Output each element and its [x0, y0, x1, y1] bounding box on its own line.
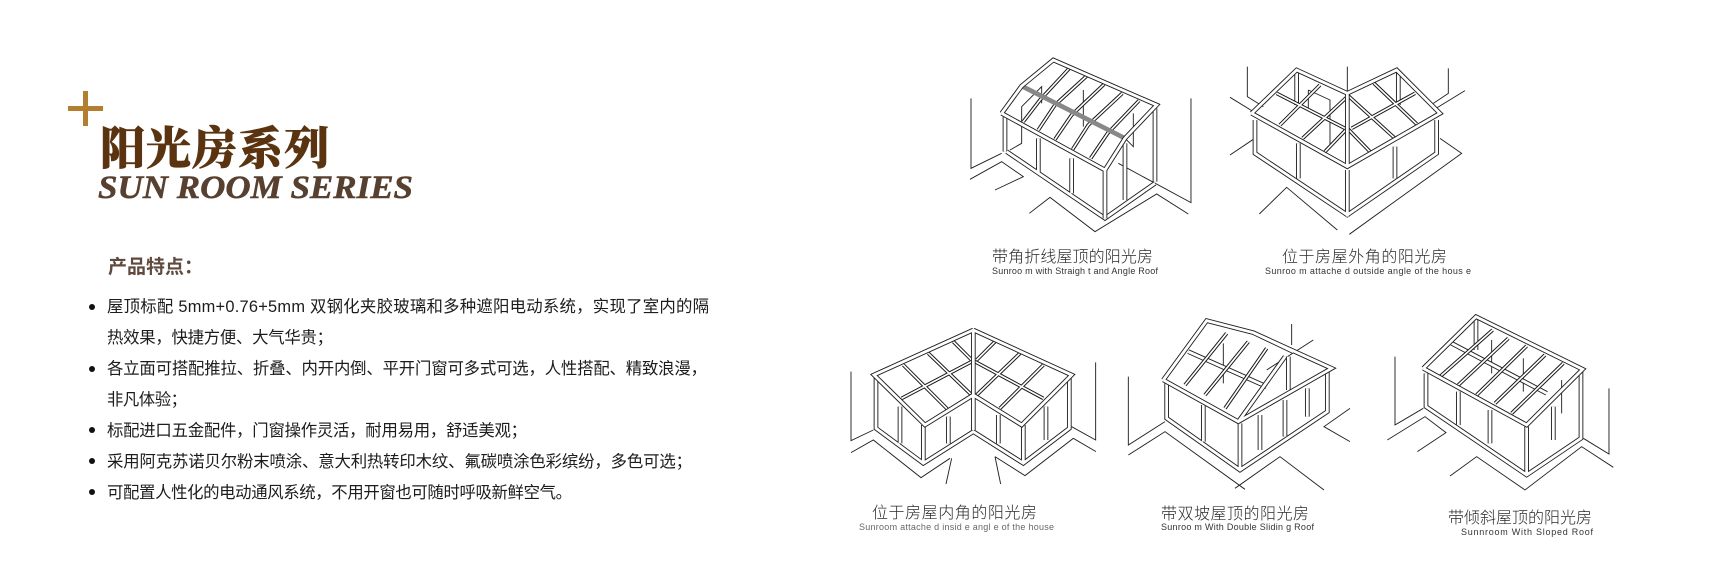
caption: English: Sunnroom With Sloped Roof	[1461, 527, 1593, 537]
panel: sunroom with double sliding roof	[1128, 321, 1350, 532]
heading: English title: SUN ROOM SERIES	[98, 170, 413, 206]
caption: English: Sunroo m with Straigh t and Angle Roof	[992, 266, 1158, 276]
heading: Chinese title: 阳光房系列	[100, 123, 329, 174]
caption: Chinese: 带双坡屋顶的阳光房	[1161, 505, 1309, 523]
panel: sunroom attached outside angle of the house	[1230, 67, 1471, 276]
caption: Chinese: 带角折线屋顶的阳光房	[992, 248, 1153, 266]
feature item 2: 各立面可搭配推拉、折叠、内开内倒、平开门窗可多式可选，人性搭配、精致浪漫，	[107, 355, 707, 379]
caption: Chinese: 位于房屋内角的阳光房	[872, 504, 1037, 522]
icon: plus mark	[68, 91, 103, 126]
diagram: straight and angle roof	[970, 60, 1191, 232]
feature item 1	[89, 293, 709, 348]
diagram: double sliding roof	[1128, 321, 1350, 490]
feature item 1: 屋顶标配 5mm+0.76+5mm 双钢化夹胶玻璃和多种遮阳电动系统，实现了室内的隔	[107, 293, 709, 317]
feature item 3: 标配进口五金配件，门窗操作灵活，耐用易用，舒适美观；	[107, 417, 527, 441]
diagram: inside angle	[851, 330, 1096, 484]
panel: sunroom with sloped roof	[1387, 317, 1613, 537]
diagram: sloped roof	[1387, 317, 1613, 490]
feature item 1: 热效果，快捷方便、大气华贵；	[107, 324, 333, 348]
feature item 2: 非凡体验；	[107, 386, 187, 410]
caption: English: Sunroom attache d insid e angl e of the house	[859, 522, 1054, 532]
panel: sunroom with straight and angle roof	[970, 60, 1191, 276]
feature item 5: 可配置人性化的电动通风系统，不用开窗也可随时呼吸新鲜空气。	[107, 479, 572, 503]
feature item 2	[89, 355, 707, 410]
panel: sunroom attached inside angle of the house	[851, 330, 1096, 532]
diagram: outside angle	[1230, 67, 1465, 234]
panel: product introduction	[68, 91, 709, 503]
subheading: product features: 产品特点：	[108, 252, 203, 279]
caption: English: Sunroo m attache d outside angle of the hous e	[1265, 266, 1471, 276]
caption: Chinese: 带倾斜屋顶的阳光房	[1448, 509, 1592, 527]
caption: Chinese: 位于房屋外角的阳光房	[1282, 248, 1447, 266]
caption: English: Sunroo m With Double Slidin g Roof	[1161, 522, 1314, 532]
feature item 4: 采用阿克苏诺贝尔粉末喷涂、意大利热转印木纹、氟碳喷涂色彩缤纷，多色可选；	[107, 448, 692, 472]
feature list	[89, 293, 709, 503]
